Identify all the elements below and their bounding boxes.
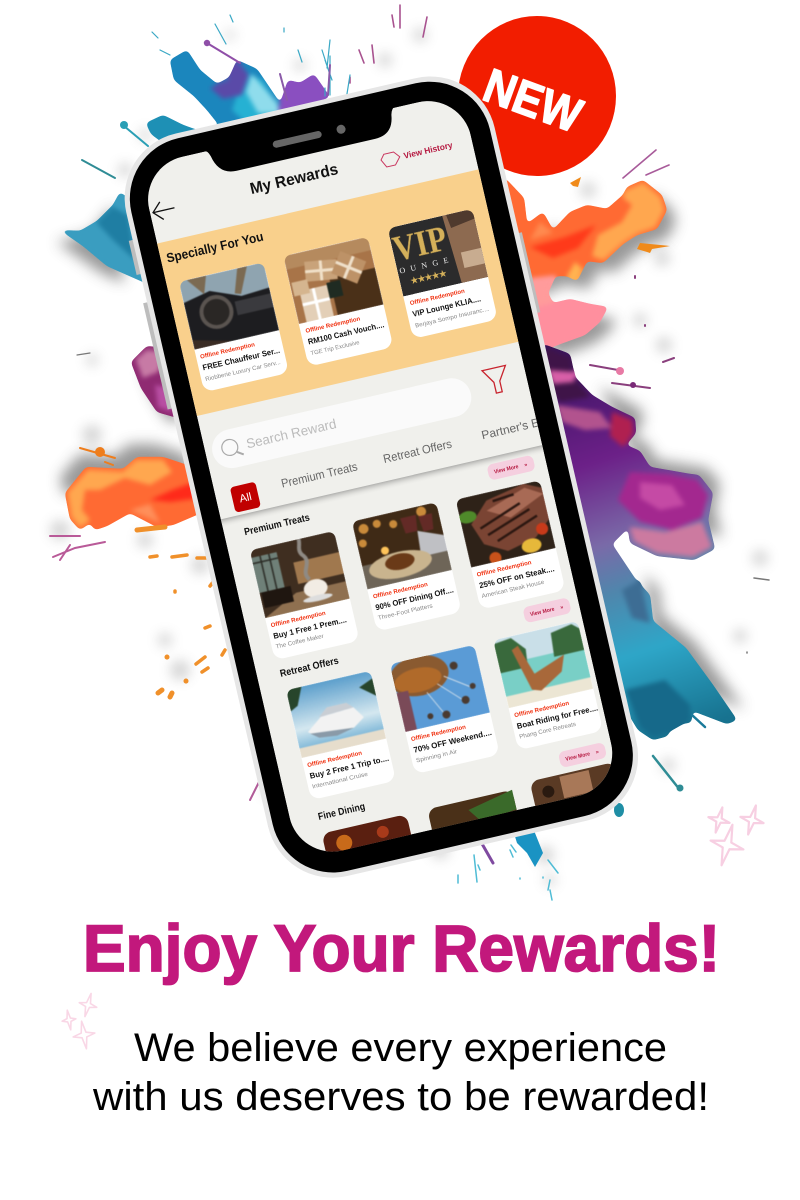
card: vip lounge: VIP — [389, 218, 451, 269]
card: steak: 25% OFF on Steak.... — [478, 564, 555, 590]
card: boat: Phang Core Retreats — [519, 722, 577, 741]
card: coffee: Offline Redemption — [270, 611, 327, 629]
camera — [336, 124, 346, 135]
sparkle stars: right — [705, 802, 767, 870]
card: coffee: The Coffee Maker — [275, 634, 324, 651]
card: boat: Boat Riding for Free.... — [516, 703, 599, 731]
splash: right droplets — [590, 150, 769, 817]
card: boat — [493, 621, 603, 750]
card: steak: Offline Redemption — [476, 560, 533, 579]
card: fine dining 1 — [323, 816, 412, 852]
specially for you band — [157, 169, 518, 416]
search bar: Search Reward — [245, 416, 338, 451]
phone screen — [148, 101, 612, 852]
view history link — [380, 143, 452, 168]
card: coffee — [249, 531, 360, 660]
subtext — [92, 1026, 709, 1119]
search bar — [212, 378, 471, 468]
retreat offers heading: Retreat Offers — [279, 655, 340, 680]
premium treats heading: Premium Treats — [243, 512, 311, 538]
splash: right purple to blue stream — [530, 344, 737, 740]
view more button 1: » — [524, 462, 528, 469]
view more button 3 — [559, 743, 606, 767]
card: vip lounge: OUNGE — [398, 256, 449, 276]
splash: right orange droplets — [570, 177, 670, 253]
phone bezel — [111, 63, 651, 891]
card: cruise — [286, 670, 396, 800]
card: fine dining 2 — [429, 790, 517, 830]
card: dining: Three-Foot Platters — [378, 603, 433, 622]
subtext: with us deserves to be rewarded! — [92, 1075, 709, 1119]
card: steak: American Steak House — [481, 580, 546, 600]
card: vip lounge: VIP Lounge KLIA.... — [412, 294, 482, 319]
paint splash shadows — [57, 195, 744, 709]
notch — [199, 105, 402, 178]
phone body — [117, 69, 645, 885]
card: vip lounge: Berjaya Sompo Insuranc.... — [415, 307, 490, 330]
screen title: My Rewards — [248, 161, 340, 198]
speaker — [272, 130, 322, 148]
card: cruise: International Cruise — [312, 772, 369, 790]
splash: bottom drips — [250, 778, 558, 900]
view more button 3: » — [595, 749, 600, 756]
splash: top blue and purple — [60, 50, 330, 285]
category tabs: Retreat Offers — [382, 437, 453, 466]
card: weekend swing — [391, 646, 498, 772]
NEW badge — [458, 16, 616, 176]
NEW badge: NEW — [476, 59, 589, 144]
card: weekend swing: Offline Redemption — [411, 725, 467, 743]
card: boat: Offline Redemption — [514, 701, 570, 719]
fine dining heading: Fine Dining — [317, 801, 366, 823]
card: cash voucher: RM100 Cash Vouch.... — [307, 320, 385, 347]
card: weekend swing: 70% OFF Weekend.... — [413, 728, 493, 755]
category tabs: Premium Treats — [280, 459, 359, 491]
card: free chauffeur: Offline Redemption — [200, 342, 256, 361]
card: vip lounge — [388, 209, 498, 339]
search icon — [221, 438, 244, 456]
card: dining — [352, 502, 462, 632]
splash: left magenta — [131, 346, 185, 420]
card: vip lounge: ★★★★★ — [409, 268, 449, 287]
category tabs: All — [238, 491, 253, 505]
card: coffee: Buy 1 Free 1 Prem.... — [272, 615, 348, 641]
category tabs: Partner's Ex — [480, 414, 546, 442]
card: cash voucher — [283, 236, 393, 367]
card: weekend swing: Spinning in Air — [416, 749, 458, 764]
subtext: We believe every experience — [134, 1026, 667, 1070]
card: cruise: Buy 2 Free 1 Trip to.... — [309, 754, 390, 781]
card: dining: 90% OFF Dining Off.... — [375, 585, 455, 612]
card: cash voucher: Offline Redemption — [305, 316, 361, 335]
view more button 1: View More — [494, 464, 519, 476]
splash: right orange — [490, 178, 667, 352]
scattered splatter shadows — [50, 28, 768, 886]
card: cash voucher: TGE Trip Exclusive — [310, 340, 361, 357]
splash: left droplets — [50, 353, 225, 697]
filter icon — [480, 364, 506, 394]
view history link: View History — [403, 140, 454, 161]
sparkle stars: left — [60, 991, 100, 1051]
side buttons — [129, 154, 543, 409]
back arrow — [152, 202, 175, 220]
card: free chauffeur: Riobberie Luxury Car Serv... — [205, 360, 282, 383]
splash: left orange — [65, 457, 215, 530]
card: free chauffeur: FREE Chauffeur Ser... — [202, 346, 281, 372]
card: cruise: Offline Redemption — [307, 751, 363, 769]
view more button 2 — [524, 598, 570, 622]
specially for you heading: Specially For You — [165, 229, 265, 266]
view more button 2: » — [560, 605, 564, 611]
card: vip lounge: Offline Redemption — [410, 289, 466, 307]
category tabs — [230, 414, 549, 513]
headline: Enjoy Your Rewards! — [83, 911, 720, 985]
splash: top droplets — [82, 5, 427, 178]
view more button 3: View More — [565, 751, 591, 763]
card: steak — [454, 480, 565, 610]
card: dining: Offline Redemption — [373, 582, 429, 600]
phone — [108, 63, 654, 892]
card: free chauffeur — [179, 262, 289, 392]
view more button 2: View More — [530, 607, 555, 618]
view more button 1 — [488, 456, 534, 480]
card: fine dining 3 — [531, 764, 611, 806]
